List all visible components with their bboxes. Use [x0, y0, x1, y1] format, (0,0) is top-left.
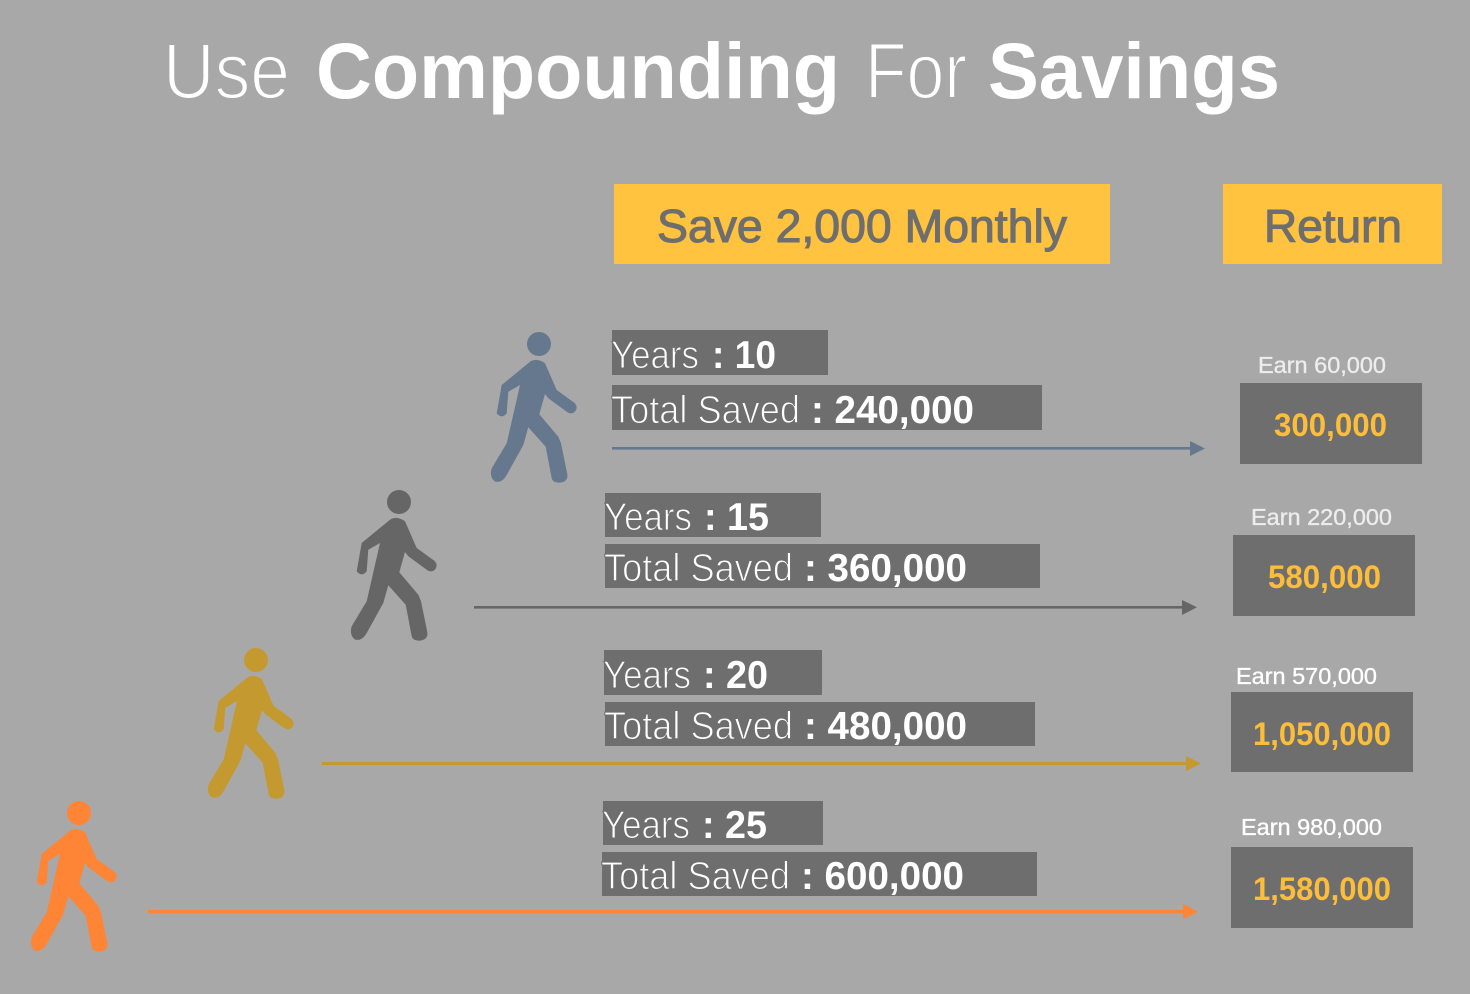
- total saved label: : 600,000: [801, 855, 964, 898]
- return value: [1231, 847, 1413, 928]
- years label: [611, 330, 828, 377]
- years label: Years: [611, 334, 699, 377]
- total saved label: [604, 544, 1040, 590]
- total saved label: : 240,000: [811, 389, 974, 432]
- earn label: Earn 980,000: [1241, 814, 1382, 840]
- earn label: Earn 60,000: [1258, 352, 1386, 378]
- heading: return: [1223, 184, 1442, 264]
- row: 10 years: [491, 330, 1422, 483]
- icon: walker slate: [491, 332, 577, 483]
- arrow: [148, 904, 1198, 919]
- years label: : 25: [702, 804, 767, 847]
- return value: 1,050,000: [1253, 716, 1391, 752]
- earn label: Earn 570,000: [1236, 663, 1377, 689]
- return value: 300,000: [1274, 407, 1387, 443]
- total saved label: Total Saved: [601, 855, 790, 898]
- total saved label: [604, 702, 1035, 748]
- icon: walker orange: [31, 801, 117, 952]
- title: Savings: [988, 26, 1280, 115]
- return value: [1240, 383, 1422, 464]
- return value: 1,580,000: [1253, 871, 1391, 907]
- years label: : 10: [712, 334, 776, 377]
- years label: : 15: [704, 496, 769, 539]
- title: [163, 26, 1280, 115]
- years label: Years: [604, 496, 692, 539]
- heading: save 2,000 monthly: Save 2,000 Monthly: [657, 200, 1067, 252]
- arrow: [612, 441, 1205, 456]
- row: 15 years: [351, 490, 1415, 641]
- row: 25 years: [31, 801, 1413, 952]
- years label: Years: [602, 804, 690, 847]
- total saved label: [611, 385, 1042, 432]
- total saved label: Total Saved: [611, 389, 800, 432]
- return value: [1231, 692, 1413, 772]
- heading: save 2,000 monthly: [614, 184, 1110, 264]
- title: Use: [163, 26, 290, 115]
- arrow: [474, 600, 1197, 615]
- row: 20 years: [208, 648, 1413, 799]
- years label: [604, 493, 821, 539]
- title: For: [865, 26, 967, 115]
- total saved label: Total Saved: [604, 705, 793, 748]
- earn label: Earn 220,000: [1251, 504, 1392, 530]
- total saved label: : 480,000: [804, 705, 967, 748]
- years label: [603, 650, 822, 697]
- icon: walker grey: [351, 490, 437, 641]
- total saved label: [601, 852, 1037, 898]
- years label: : 20: [703, 654, 768, 697]
- title: Compounding: [316, 26, 840, 115]
- return value: [1233, 535, 1415, 616]
- heading: return: Return: [1264, 200, 1402, 252]
- years label: Years: [603, 654, 691, 697]
- arrow: [322, 756, 1201, 771]
- icon: walker gold: [208, 648, 294, 799]
- return value: 580,000: [1268, 559, 1381, 595]
- years label: [602, 801, 823, 847]
- total saved label: Total Saved: [604, 547, 793, 590]
- total saved label: : 360,000: [804, 547, 967, 590]
